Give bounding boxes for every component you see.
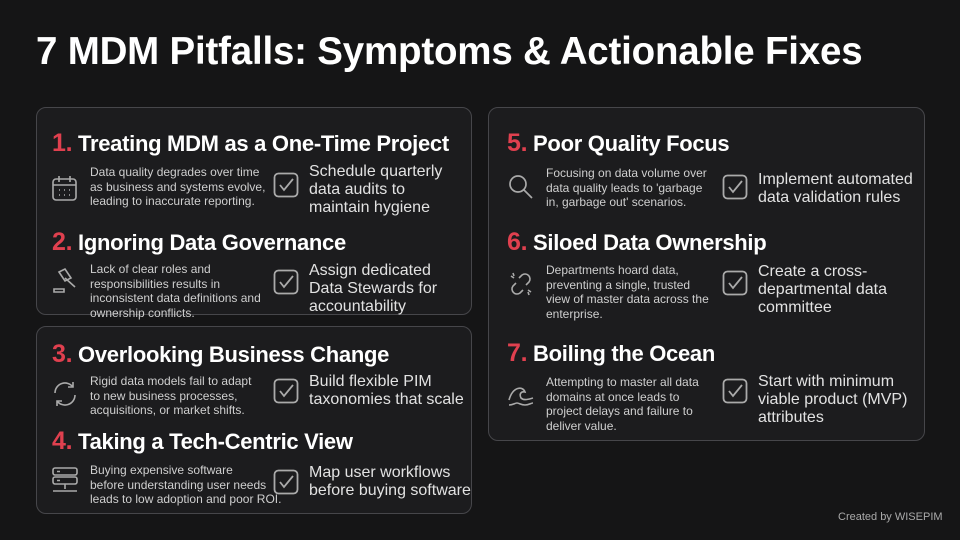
symptom 6: view of master data across the <box>546 292 709 306</box>
symptom 7: domains at once leads to <box>546 390 679 404</box>
fix 3: Build flexible PIM <box>309 373 432 390</box>
icon: broken link <box>510 272 532 296</box>
symptom 3: acquisitions, or market shifts. <box>90 403 245 417</box>
symptom 4 <box>90 463 281 506</box>
fix 2: Assign dedicated <box>309 262 431 279</box>
fix 4: before buying software <box>309 482 471 499</box>
fix 7: attributes <box>758 409 824 426</box>
heading 2: 2. Ignoring Data Governance <box>52 228 346 256</box>
fix 1 <box>309 163 442 216</box>
symptom 5: in, garbage out' scenarios. <box>546 195 686 209</box>
heading 1: 1. Treating MDM as a One-Time Project <box>52 129 449 157</box>
fix 3 <box>309 373 464 408</box>
fix 7: viable product (MVP) <box>758 391 907 408</box>
symptom 2: Lack of clear roles and <box>90 262 211 276</box>
symptom 7: deliver value. <box>546 418 617 432</box>
icon: server <box>52 467 78 492</box>
fix 7 <box>758 373 907 426</box>
fix 4: Map user workflows <box>309 464 450 481</box>
fix 3: taxonomies that scale <box>309 391 464 408</box>
panel: pitfalls 1-2 <box>36 107 472 315</box>
symptom 3 <box>90 374 252 417</box>
icon: refresh <box>54 382 76 406</box>
symptom 6 <box>546 263 709 320</box>
fix 4 <box>309 464 471 499</box>
symptom 6: preventing a single, trusted <box>546 278 690 292</box>
symptom 1: Data quality degrades over time <box>90 165 259 179</box>
fix 7: Start with minimum <box>758 373 894 390</box>
title: 7 MDM Pitfalls: Symptoms & Actionable Fixes <box>36 30 862 73</box>
fix 1: data audits to <box>309 181 405 198</box>
symptom 6: enterprise. <box>546 306 603 320</box>
symptom 7: Attempting to master all data <box>546 375 699 389</box>
symptom 7: project delays and failure to <box>546 404 693 418</box>
icon: check 5 <box>722 174 748 200</box>
symptom 2: inconsistent data definitions and <box>90 291 261 305</box>
symptom 2: responsibilities results in <box>90 276 220 290</box>
symptom 2 <box>90 262 261 320</box>
fix 2: Data Stewards for <box>309 280 437 297</box>
symptom 4: before understanding user needs <box>90 478 266 492</box>
icon: waves <box>508 387 534 406</box>
fix 5: Implement automated <box>758 171 913 188</box>
fix 6 <box>758 263 888 316</box>
symptom 5: data quality leads to 'garbage <box>546 180 702 194</box>
heading 3: 3. Overlooking Business Change <box>52 340 389 368</box>
symptom 1 <box>90 165 265 208</box>
symptom 6: Departments hoard data, <box>546 263 679 277</box>
fix 6: Create a cross- <box>758 263 867 280</box>
heading 5: 5. Poor Quality Focus <box>507 129 729 157</box>
symptom 4: leads to low adoption and poor ROI. <box>90 492 281 506</box>
icon: check 4 <box>274 470 298 494</box>
symptom 4: Buying expensive software <box>90 463 233 477</box>
panel: pitfalls 5-7 <box>488 107 925 441</box>
fix 2 <box>309 262 437 315</box>
icon: check 1 <box>274 172 298 198</box>
symptom 3: Rigid data models fail to adapt <box>90 374 251 388</box>
fix 1: maintain hygiene <box>309 199 430 216</box>
symptom 2: ownership conflicts. <box>90 306 195 320</box>
fix 6: departmental data <box>758 281 887 298</box>
fix 2: accountability <box>309 298 406 315</box>
panel: pitfalls 3-4 <box>36 326 472 514</box>
icon: check 2 <box>274 270 298 294</box>
icon: gavel <box>53 268 76 293</box>
icon: check 7 <box>722 378 748 404</box>
icon: check 6 <box>722 270 748 296</box>
footer credit: Created by WISEPIM <box>838 511 943 523</box>
symptom 7 <box>546 375 699 432</box>
fix 6: committee <box>758 299 832 316</box>
symptom 3: to new business processes, <box>90 388 237 402</box>
fix 5: data validation rules <box>758 189 900 206</box>
fix 1: Schedule quarterly <box>309 163 442 180</box>
fix 5 <box>758 171 913 206</box>
icon: magnifier <box>509 175 532 199</box>
icon: calendar <box>52 176 77 201</box>
symptom 1: as business and systems evolve, <box>90 180 265 194</box>
heading 7: 7. Boiling the Ocean <box>507 339 715 367</box>
heading 6: 6. Siloed Data Ownership <box>507 228 766 256</box>
heading 4: 4. Taking a Tech-Centric View <box>52 427 353 455</box>
symptom 5: Focusing on data volume over <box>546 166 707 180</box>
symptom 5 <box>546 166 707 209</box>
icon: check 3 <box>274 378 298 404</box>
symptom 1: leading to inaccurate reporting. <box>90 194 255 208</box>
